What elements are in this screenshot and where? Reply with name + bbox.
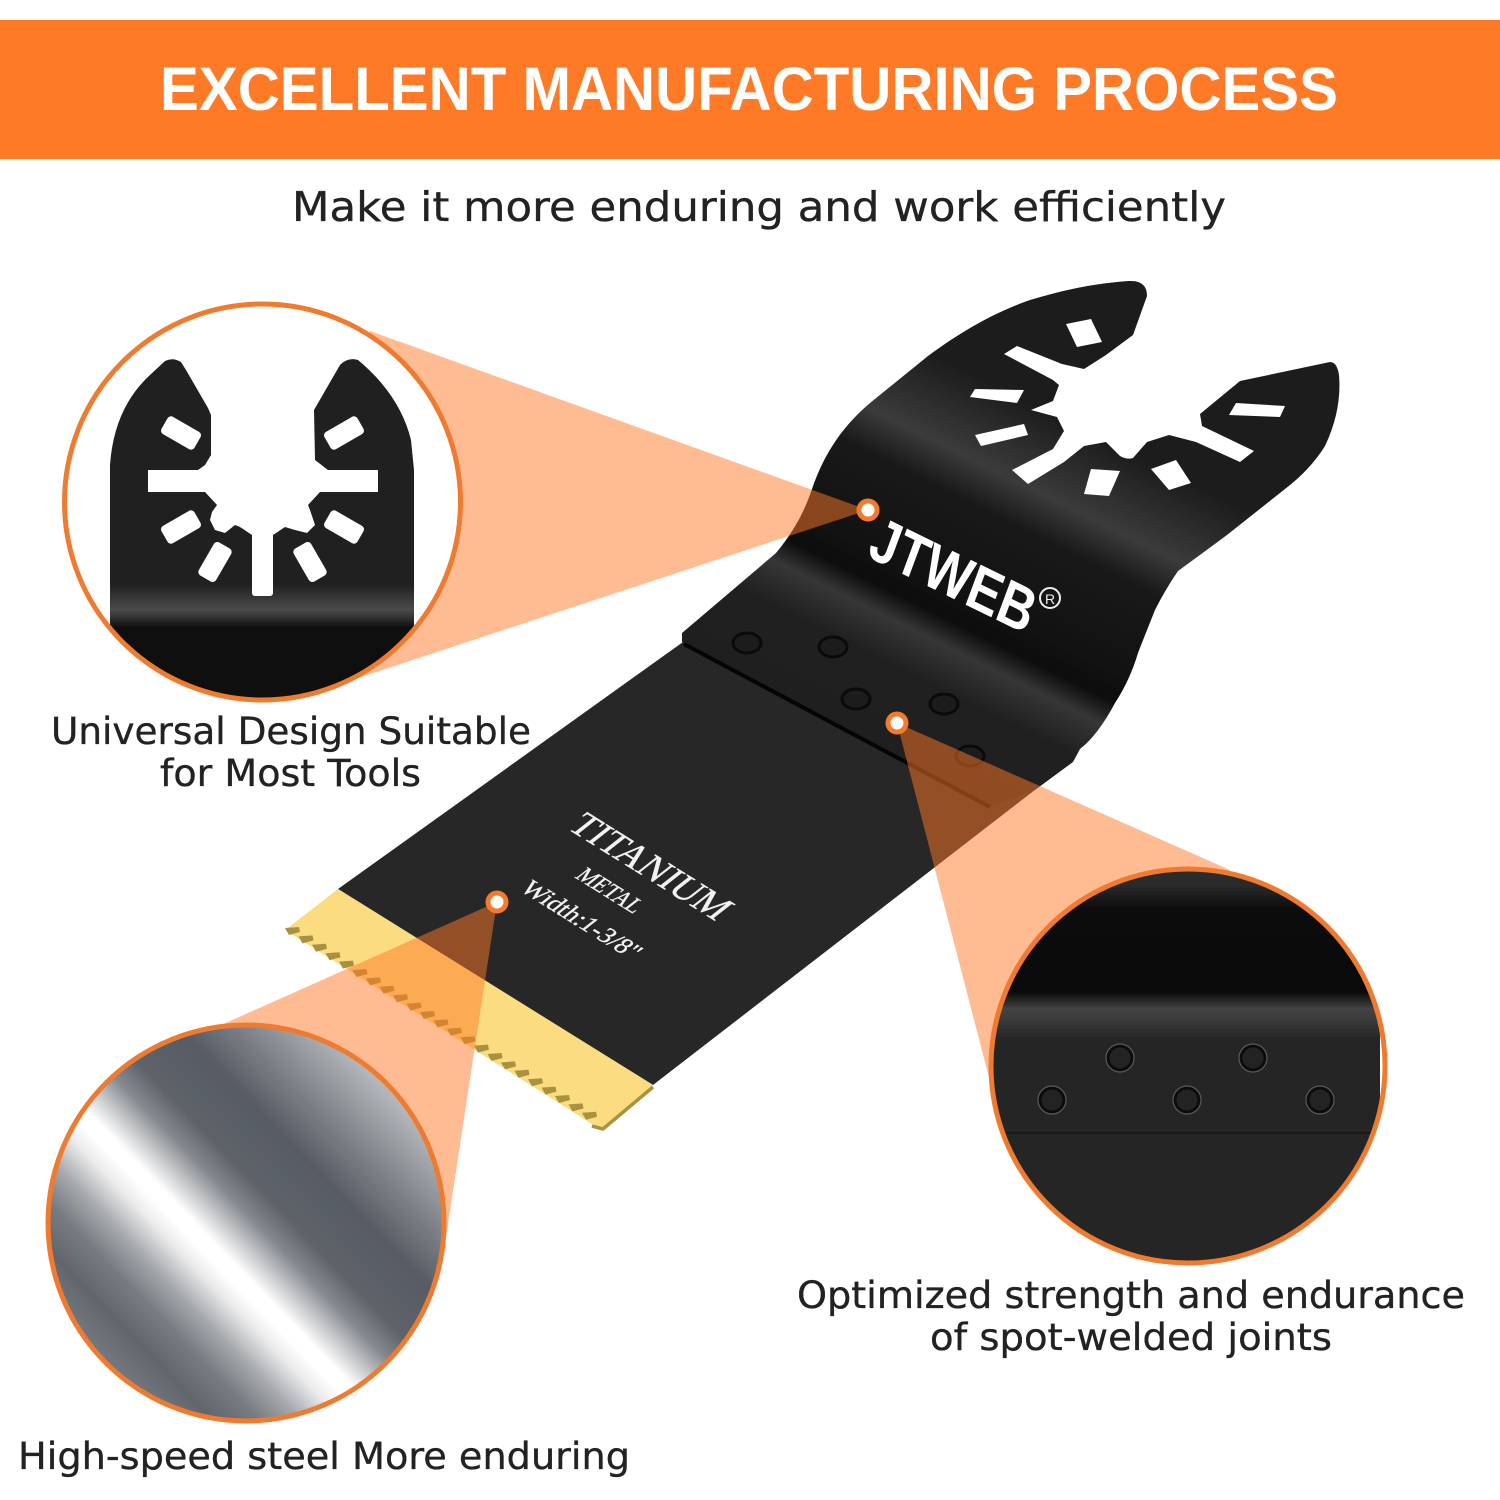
caption: universal design: for Most Tools bbox=[160, 752, 421, 795]
mount shape bbox=[110, 359, 414, 585]
gold titanium cutting edge bbox=[285, 889, 653, 1127]
title banner bbox=[0, 20, 1500, 159]
weld rivets bbox=[1040, 1046, 1332, 1112]
blade markings: TITANIUM bbox=[559, 806, 744, 927]
blade markings bbox=[514, 806, 744, 964]
edge lip bbox=[592, 1087, 653, 1129]
blade markings: Width:1-3/8" bbox=[514, 876, 649, 964]
brand logo: R bbox=[1045, 591, 1055, 607]
blade lower body bbox=[338, 642, 1040, 1085]
mount plate edge bbox=[684, 644, 990, 807]
brand logo: JTWEB bbox=[861, 504, 1045, 647]
magnifier: steel surface bbox=[48, 1025, 444, 1421]
blade markings: METAL bbox=[569, 864, 650, 918]
caption: universal design: Universal Design Suitable bbox=[51, 710, 531, 753]
beam: steel bbox=[210, 902, 497, 1250]
mount bend highlight bbox=[110, 589, 414, 698]
mount slot cutout redraw bbox=[252, 585, 273, 596]
caption: spot welds: of spot-welded joints bbox=[930, 1316, 1332, 1359]
beam: mount design bbox=[352, 331, 868, 680]
callout dot: steel bbox=[488, 893, 506, 911]
product: saw blade bbox=[285, 281, 1339, 1129]
magnifier: universal mount bbox=[64, 304, 460, 710]
mount holes bbox=[160, 415, 365, 583]
weld plate bbox=[994, 1040, 1380, 1260]
subtitle: Make it more enduring and work efficiently bbox=[292, 183, 1226, 231]
saw teeth bbox=[285, 927, 597, 1120]
caption: spot welds bbox=[797, 1274, 1465, 1359]
caption: steel: High-speed steel More enduring bbox=[18, 1435, 630, 1478]
rivets bbox=[733, 633, 984, 766]
title banner: EXCELLENT MANUFACTURING PROCESS bbox=[160, 55, 1338, 123]
callout beams bbox=[210, 331, 1230, 1250]
blade head with mounting cutout bbox=[682, 281, 1339, 806]
beam: spot welds bbox=[897, 723, 1230, 1120]
magnifier: spot welds bbox=[991, 868, 1385, 1268]
callout dot: mount bbox=[859, 501, 877, 519]
callout dot: welds bbox=[888, 714, 906, 732]
caption: spot welds: Optimized strength and endurance bbox=[797, 1274, 1465, 1317]
caption: universal design bbox=[51, 710, 531, 795]
